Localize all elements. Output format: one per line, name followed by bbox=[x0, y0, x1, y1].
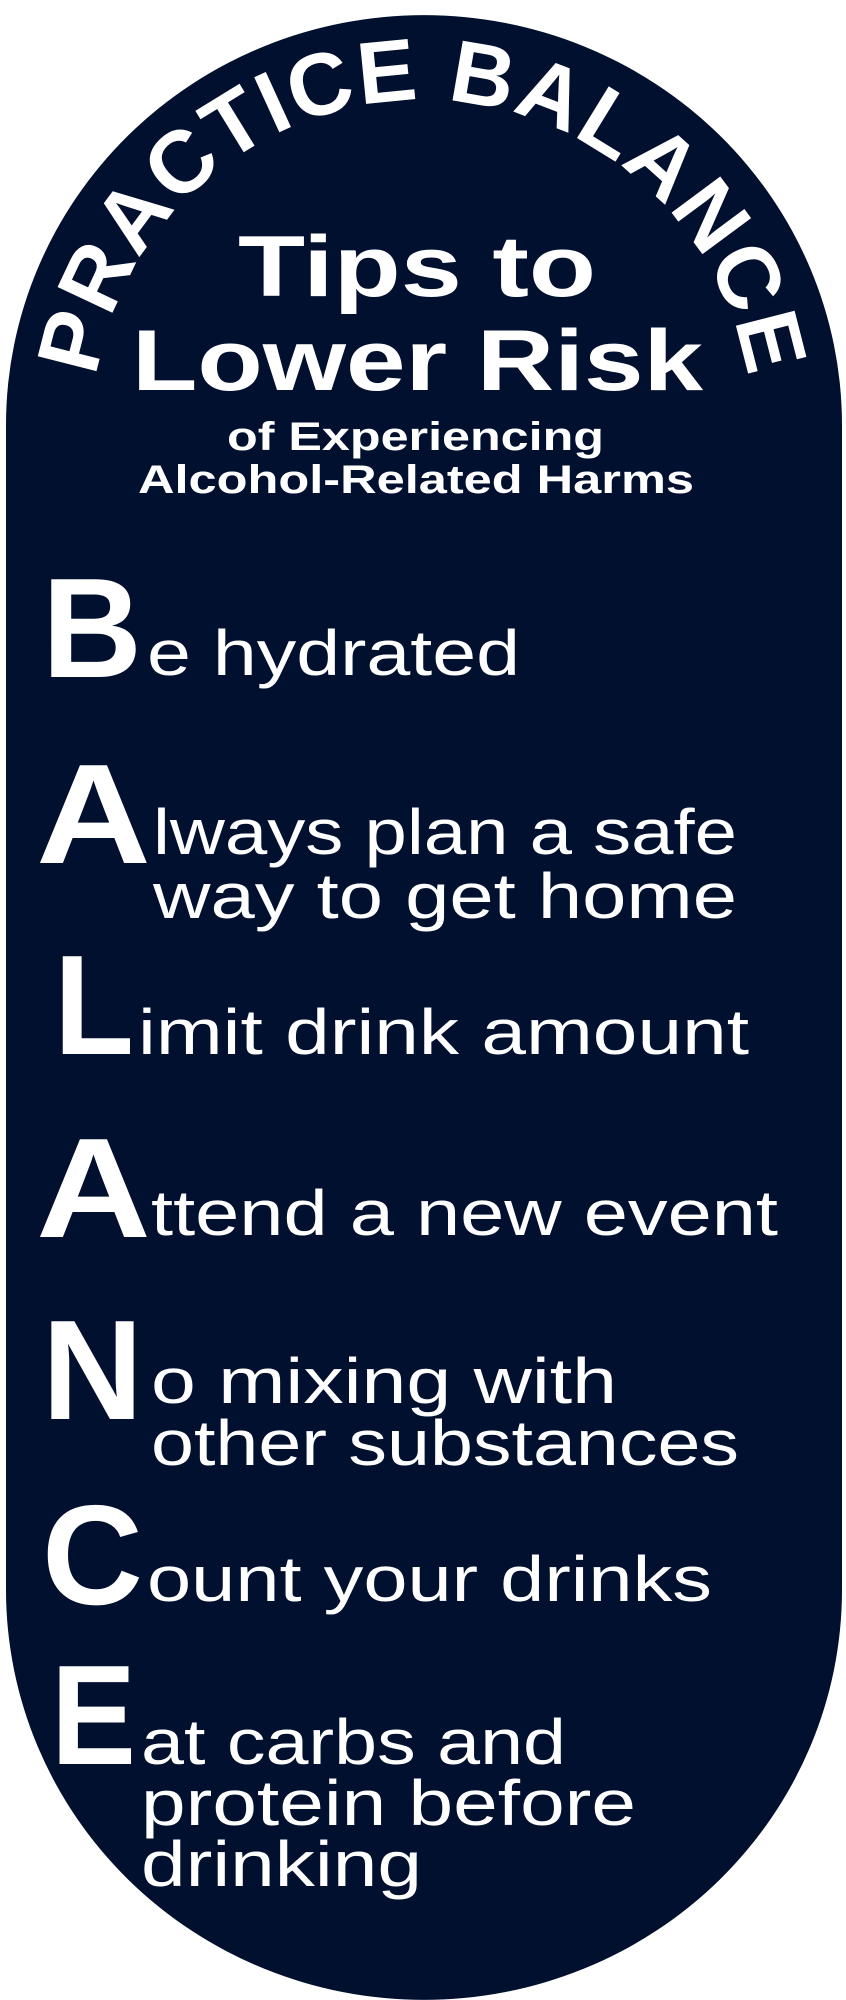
tip A: A bbox=[36, 735, 151, 894]
tip E: drinking bbox=[141, 1828, 422, 1900]
subtitle bbox=[138, 415, 694, 502]
tip E: protein before bbox=[141, 1767, 636, 1839]
tip A bbox=[36, 735, 737, 932]
tip B: e hydrated bbox=[147, 617, 520, 689]
title: Tips to Lower Risk: Lower Risk bbox=[132, 313, 703, 409]
tip E: E bbox=[51, 1636, 136, 1795]
tip C: C bbox=[42, 1476, 143, 1635]
tip N: o mixing with bbox=[151, 1345, 617, 1417]
tip N: other substances bbox=[151, 1407, 739, 1479]
tip E bbox=[51, 1636, 636, 1900]
tip A2 bbox=[36, 1109, 778, 1268]
title: Tips to Lower Risk bbox=[132, 219, 703, 409]
tip C bbox=[42, 1476, 712, 1635]
tip N bbox=[42, 1291, 739, 1479]
arc heading: PRACTICE BALANCE: PRACTICE BALANCE bbox=[38, 39, 806, 374]
tip B bbox=[42, 549, 520, 708]
title: Tips to Lower Risk: Tips to bbox=[238, 219, 596, 315]
tip L: L bbox=[54, 926, 134, 1085]
tip N: N bbox=[42, 1291, 143, 1450]
tip L: imit drink amount bbox=[138, 996, 749, 1068]
tip A2: ttend a new event bbox=[151, 1177, 778, 1249]
subtitle: Alcohol-Related Harms bbox=[138, 458, 694, 502]
tip C: ount your drinks bbox=[147, 1543, 712, 1615]
tip A: lways plan a safe bbox=[153, 796, 737, 868]
tip B: B bbox=[42, 549, 142, 708]
tip E: at carbs and bbox=[141, 1706, 566, 1778]
subtitle: of Experiencing bbox=[227, 415, 604, 459]
tip A: way to get home bbox=[152, 860, 737, 932]
tip A2: A bbox=[36, 1109, 151, 1268]
tip L bbox=[54, 926, 749, 1085]
